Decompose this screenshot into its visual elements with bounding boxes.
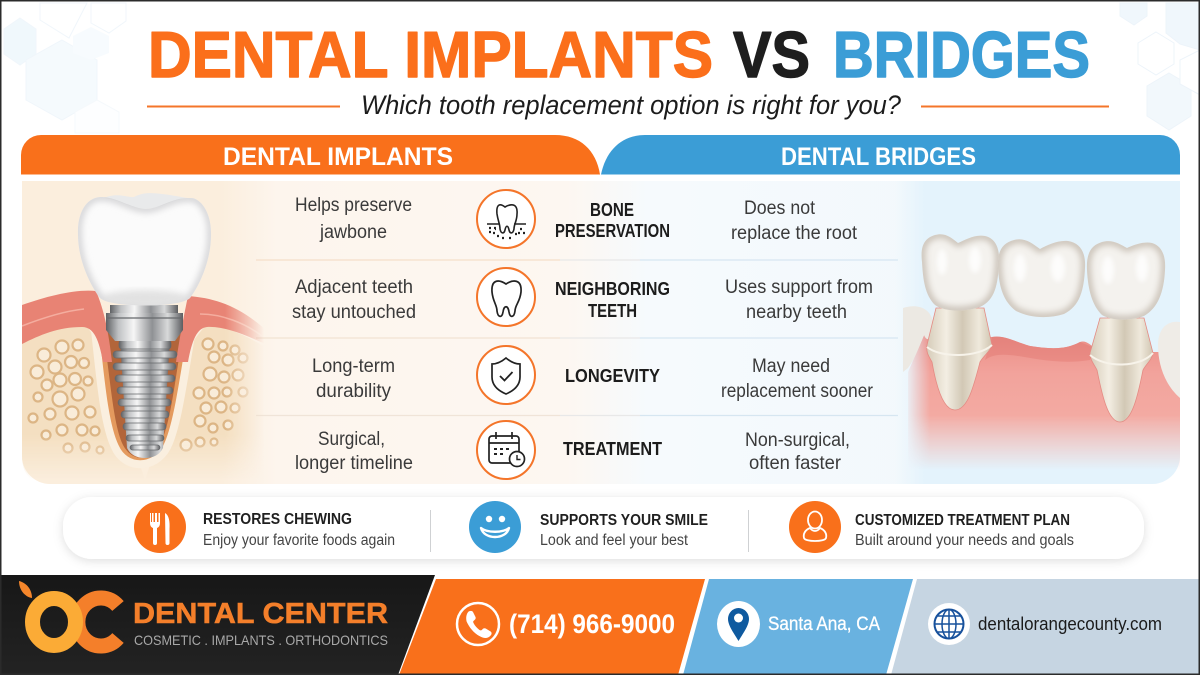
implant screw [106, 305, 183, 458]
illustration: dental bridge [903, 234, 1180, 470]
footer: logo block: COSMETIC . IMPLANTS . ORTHODONTICS [134, 632, 388, 648]
left text [292, 277, 416, 323]
left text: longer timeline [295, 453, 413, 474]
label: PRESERVATION [555, 221, 670, 241]
right text: Uses support from [725, 277, 873, 298]
right text [731, 198, 858, 244]
benefit: customized treatment plan [789, 501, 1074, 553]
socket [95, 330, 192, 464]
gum [908, 333, 1180, 470]
right text: nearby teeth [746, 302, 847, 323]
icon: smile [469, 501, 521, 553]
neighbouring teeth [903, 306, 933, 372]
right text [725, 277, 873, 323]
benefit: customized treatment plan: CUSTOMIZED TREATMENT PLAN [855, 512, 1070, 529]
header: dental implants: DENTAL IMPLANTS [223, 143, 453, 171]
label [555, 279, 670, 321]
icon: globe [928, 603, 970, 645]
left text: Long-term [312, 356, 395, 377]
panel: bridge photo background [895, 181, 1180, 484]
footer: phone [399, 579, 705, 675]
row dividers [256, 260, 898, 416]
benefit: restores chewing: RESTORES CHEWING [203, 511, 352, 528]
footer: website: dentalorangecounty.com [978, 613, 1162, 634]
right text: Non-surgical, [745, 430, 850, 451]
bridge crowns [922, 234, 1165, 320]
label: TEETH [588, 301, 637, 321]
footer: location [683, 579, 913, 675]
right text: replace the root [731, 223, 858, 244]
title: DENTAL IMPLANTS [148, 18, 713, 91]
right text [745, 430, 850, 474]
left text: jawbone [319, 222, 387, 243]
benefits bar [63, 497, 1144, 559]
header: dental implants [21, 135, 600, 174]
logo mark [19, 581, 118, 646]
left text: Surgical, [318, 429, 385, 450]
benefit: supports your smile: SUPPORTS YOUR SMILE [540, 512, 708, 529]
left text [295, 195, 412, 243]
header: dental bridges [601, 135, 1180, 174]
right abutment [1090, 318, 1153, 422]
benefit: restores chewing: Enjoy your favorite foods again [203, 532, 395, 549]
icon: map pin [717, 601, 760, 647]
icon: tooth in bone [477, 190, 535, 248]
label: TREATMENT [563, 439, 662, 459]
title [148, 18, 1090, 91]
title: BRIDGES [833, 18, 1090, 91]
label: BONE [590, 200, 634, 220]
benefit: customized treatment plan: Built around your needs and goals [855, 532, 1074, 549]
left abutment [927, 308, 992, 410]
label [555, 200, 670, 241]
implant crown [78, 193, 211, 306]
icon: fork and knife [134, 501, 186, 553]
icon: shield [477, 346, 535, 404]
right text: May need [752, 356, 830, 377]
footer: phone: (714) 966-9000 [509, 609, 675, 639]
row 1: bone preservation [295, 190, 858, 248]
icon: phone [457, 603, 499, 645]
decorative hexagons top right [1120, 3, 1200, 130]
footer: logo block: DENTAL CENTER [133, 598, 388, 630]
footer: logo block [0, 575, 435, 675]
label: NEIGHBORING [555, 279, 670, 299]
left text [295, 429, 413, 474]
decorative hexagons top left [4, 3, 126, 133]
icon: person [789, 501, 841, 553]
illustration: dental implant in jawbone [22, 193, 270, 484]
right text: Does not [744, 198, 816, 219]
right text: often faster [749, 453, 842, 474]
left text: Adjacent teeth [295, 277, 413, 298]
right text: replacement sooner [721, 381, 874, 402]
benefit: supports your smile [469, 501, 708, 553]
benefit: supports your smile: Look and feel your best [540, 532, 689, 549]
title: VS [733, 18, 810, 91]
bone [22, 327, 256, 474]
label: LONGEVITY [565, 366, 660, 386]
icon: tooth [477, 268, 535, 326]
right text [721, 356, 874, 402]
panel: comparison table background [22, 181, 1180, 484]
left text: stay untouched [292, 302, 416, 323]
gum left [22, 291, 112, 362]
left text: durability [316, 381, 391, 402]
row 2: neighboring teeth [292, 268, 873, 326]
header: dental bridges: DENTAL BRIDGES [781, 143, 976, 171]
subtitle with rules: Which tooth replacement option is right for you? [361, 90, 901, 120]
footer: website [891, 579, 1200, 675]
row 3: longevity [312, 346, 874, 404]
footer: location: Santa Ana, CA [768, 614, 880, 635]
benefit: restores chewing [134, 501, 395, 553]
left text [312, 356, 395, 402]
icon: calendar with clock [477, 421, 535, 479]
gum right [176, 296, 268, 362]
row 4: treatment [295, 421, 850, 479]
left text: Helps preserve [295, 195, 412, 216]
